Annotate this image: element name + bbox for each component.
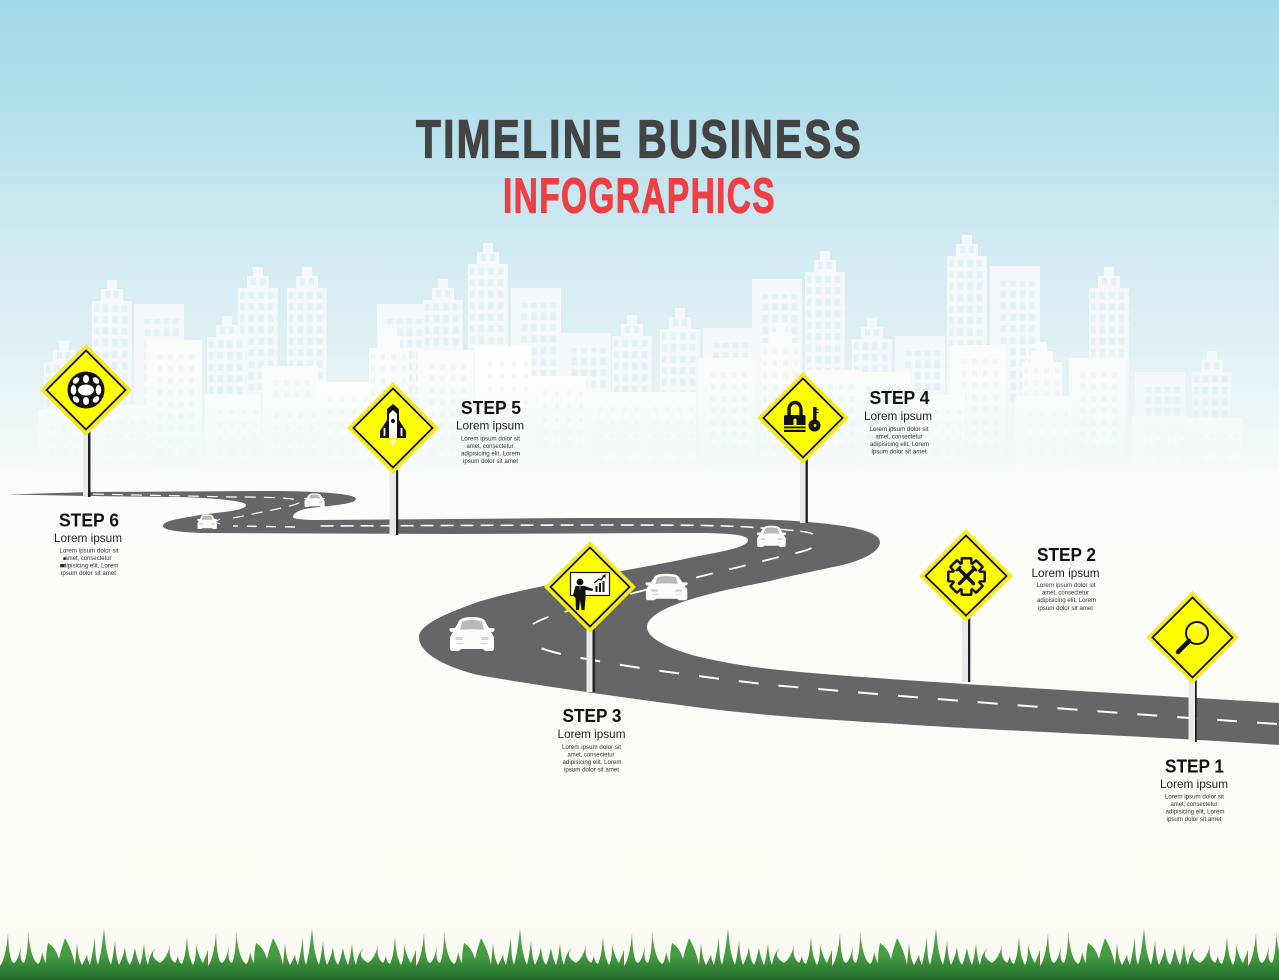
car 1 xyxy=(450,617,494,651)
step 1 sign xyxy=(1146,591,1239,742)
step 1 text: ipsum dolor sit amet xyxy=(1166,816,1222,823)
step 5 text xyxy=(456,398,524,465)
step 3 text xyxy=(558,706,626,774)
step 6 text: amet, consectetur xyxy=(64,555,112,562)
step 2 text: ipsum dolor sit amet xyxy=(1038,605,1093,612)
step 6 text xyxy=(54,510,122,577)
step 2 sign xyxy=(919,529,1013,682)
car 4 xyxy=(304,493,325,507)
step 6 text: Lorem ipsum dolor sit xyxy=(60,548,119,554)
post xyxy=(1188,678,1197,742)
grass strip xyxy=(0,928,1279,980)
step 2 text: adipisicing elit, Lorem xyxy=(1037,597,1096,604)
step 1 text: Lorem ipsum dolor sit xyxy=(1165,794,1224,800)
diamond xyxy=(1146,591,1239,684)
step 5 sign xyxy=(347,382,439,535)
step 2 text: amet, consectetur xyxy=(1042,590,1090,596)
road centre line xyxy=(90,494,1277,724)
step 1 text: Lorem ipsum xyxy=(1160,777,1228,791)
post xyxy=(800,458,808,523)
step 4 text: Lorem ipsum xyxy=(864,409,932,423)
step 1 text xyxy=(1160,756,1228,823)
step 6 text: adipisicing elit, Lorem xyxy=(60,562,118,570)
icon: lock and key xyxy=(784,402,820,432)
step 6 text: STEP 6 xyxy=(59,510,119,530)
icon: rocket xyxy=(380,404,406,447)
city skyline silhouette xyxy=(38,235,1242,422)
step 6 sign xyxy=(40,344,132,497)
icon: presenter with chart xyxy=(570,572,610,610)
diamond xyxy=(347,382,439,474)
step 4 text xyxy=(864,388,932,456)
diamond xyxy=(40,344,132,436)
step 1 text: amet, consectetur xyxy=(1170,801,1218,808)
step 6 text: ipsum dolor sit amet xyxy=(61,570,116,577)
step 3 text: amet, consectetur xyxy=(568,752,615,758)
title xyxy=(416,110,863,224)
heading: infographics: INFOGRAPHICS xyxy=(503,170,776,224)
car 5 xyxy=(197,514,217,529)
step 4 sign xyxy=(757,372,849,523)
step 5 text: STEP 5 xyxy=(461,398,521,418)
step 3 sign xyxy=(544,541,636,692)
step 3 text: adipisicing elit, Lorem xyxy=(562,759,622,766)
step 4 text: STEP 4 xyxy=(870,388,930,408)
step 5 text: amet, consectetur xyxy=(466,443,514,450)
step 4 text: ipsum dolor sit amet xyxy=(872,448,927,456)
step 2 text xyxy=(1032,545,1100,612)
road surface xyxy=(8,491,1279,745)
step 2 text: Lorem ipsum xyxy=(1032,566,1100,580)
step 5 text: Lorem ipsum xyxy=(456,418,524,432)
step 3 text: Lorem ipsum dolor sit xyxy=(562,744,621,751)
car 3 xyxy=(757,526,786,547)
post xyxy=(83,430,90,497)
step 1 text: STEP 1 xyxy=(1165,756,1224,776)
heading: timeline business: TIMELINE BUSINESS xyxy=(416,110,863,170)
step 4 text: amet, consectetur xyxy=(876,434,923,440)
step 1 text: adipisicing elit, Lorem xyxy=(1166,808,1224,816)
diamond xyxy=(757,372,849,464)
icon: gear with tools xyxy=(947,557,986,596)
winding road xyxy=(8,491,1279,745)
step 5 text: Lorem ipsum dolor sit xyxy=(461,436,520,442)
icon: globe ball xyxy=(68,372,104,408)
step 2 text: Lorem ipsum dolor sit xyxy=(1036,582,1096,589)
icon: magnifying glass xyxy=(1178,622,1208,652)
step 5 text: adipisicing elit, Lorem xyxy=(461,450,520,458)
step 3 text: STEP 3 xyxy=(562,706,622,726)
step 4 text: adipisicing elit, Lorem xyxy=(870,441,929,448)
step 6 text: Lorem ipsum xyxy=(54,531,122,545)
step 2 text: STEP 2 xyxy=(1037,545,1096,565)
car 2 xyxy=(645,574,688,600)
post xyxy=(962,618,970,682)
post xyxy=(390,470,398,535)
step 4 text: Lorem ipsum dolor sit xyxy=(870,426,929,433)
post xyxy=(586,628,595,692)
diamond xyxy=(544,541,636,633)
step 3 text: Lorem ipsum xyxy=(558,727,626,741)
step 5 text: ipsum dolor sit amet xyxy=(463,458,518,465)
diamond xyxy=(919,529,1013,622)
step 3 text: ipsum dolor sit amet xyxy=(564,766,619,774)
